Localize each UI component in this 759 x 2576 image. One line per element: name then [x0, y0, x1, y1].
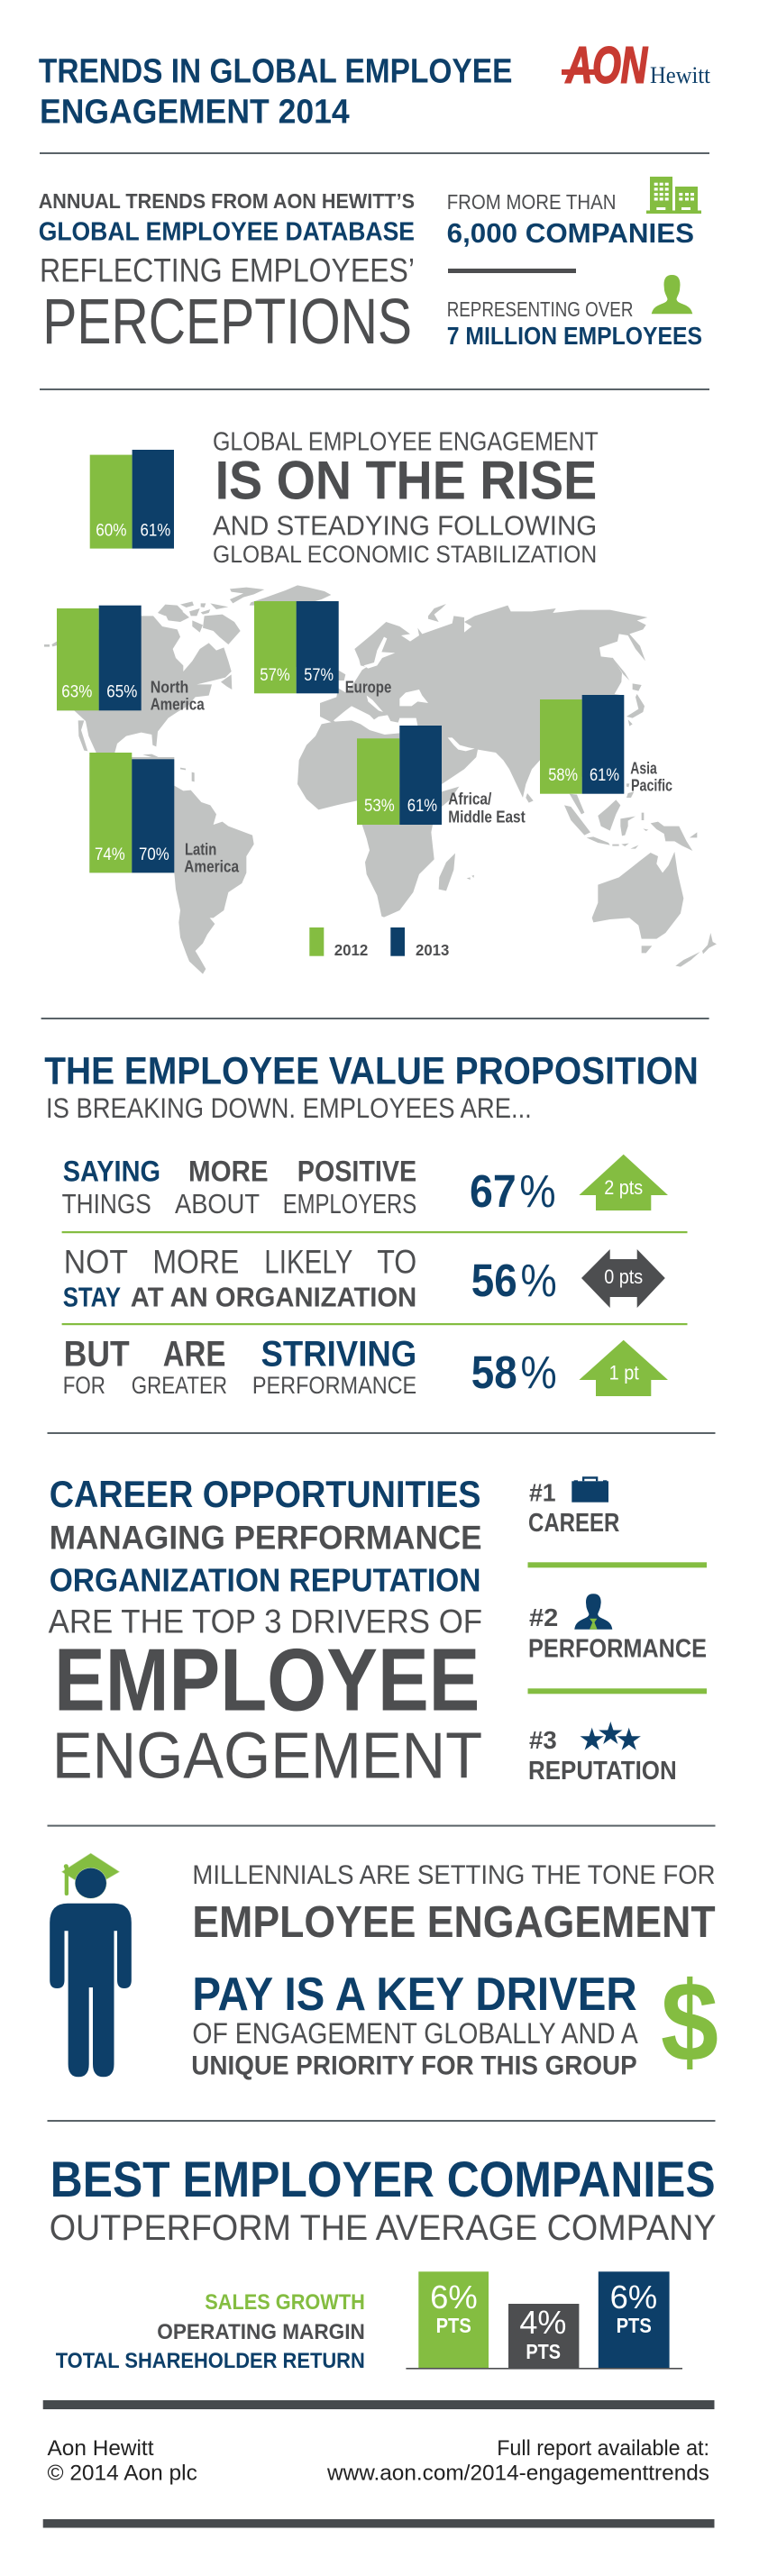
text block: employees	[447, 297, 702, 350]
text block: drivers statement: CAREER OPPORTUNITIES	[50, 1473, 480, 1515]
panel: top 3 drivers	[49, 1473, 707, 1793]
heading	[50, 2151, 717, 2248]
row: saying more positive	[62, 1155, 668, 1219]
row: not more likely to stay: MORE	[152, 1244, 239, 1281]
row: striving: FOR	[63, 1372, 105, 1399]
chart: North America: 65%	[106, 682, 137, 701]
legend: metrics: TOTAL SHAREHOLDER RETURN	[56, 2349, 365, 2373]
chart: North America	[57, 606, 205, 713]
bar chart: points difference: 6%	[430, 2279, 478, 2316]
icon: briefcase	[572, 1476, 608, 1503]
chart: Africa / Middle East: Africa/	[448, 789, 491, 808]
text block: millennials: MILLENNIALS ARE SETTING THE TONE FOR	[192, 1860, 716, 1890]
panel: footer: Aon Hewitt	[47, 2436, 154, 2461]
bar chart: points difference: PTS	[526, 2340, 561, 2363]
icon: graduate figure	[50, 1853, 132, 2077]
text block: annual trends	[39, 189, 415, 358]
title: ENGAGEMENT 2014	[40, 94, 350, 132]
row: striving	[63, 1335, 668, 1399]
panel: global engagement	[44, 427, 717, 974]
text block: companies	[447, 190, 694, 249]
panel: footer: Full report available at:	[497, 2436, 709, 2461]
icon: three stars	[580, 1721, 642, 1750]
chart: global bars: 60%	[96, 522, 127, 541]
panel: best employers	[50, 2151, 717, 2373]
heading: is on the rise: AND STEADYING FOLLOWING	[213, 509, 597, 541]
chart: Europe: 57%	[304, 666, 334, 685]
heading: is on the rise: GLOBAL EMPLOYEE ENGAGEMENT	[213, 427, 599, 456]
bar chart: points difference	[406, 2271, 682, 2370]
text block: annual trends: ANNUAL TRENDS FROM AON HEWITT’S	[39, 189, 415, 213]
row: saying more positive: POSITIVE	[297, 1156, 416, 1188]
chart: North America: America	[151, 694, 205, 713]
title	[39, 53, 512, 132]
bar chart: points difference: 4%	[519, 2304, 566, 2341]
chart: Latin America: 74%	[95, 845, 125, 864]
heading: THE EMPLOYEE VALUE PROPOSITION	[44, 1049, 699, 1092]
icon: businessman	[574, 1594, 612, 1630]
chart: Europe: 57%	[260, 666, 290, 685]
bar chart: points difference: 6%	[610, 2279, 657, 2316]
row: saying more positive: THINGS	[62, 1189, 151, 1219]
driver 3: reputation: #3	[529, 1726, 557, 1754]
text block: millennials: PAY IS A KEY DRIVER	[192, 1969, 637, 2021]
row: not more likely to stay: 56	[471, 1255, 517, 1306]
driver 1: career	[528, 1476, 619, 1538]
legend: 2012	[334, 941, 369, 959]
row: saying more positive: 2 pts	[604, 1176, 643, 1199]
heading: is on the rise	[213, 427, 599, 568]
text block: drivers statement	[49, 1473, 482, 1793]
text block: drivers statement: EMPLOYEE	[54, 1631, 480, 1730]
row: saying more positive: MORE	[188, 1156, 269, 1188]
row: not more likely to stay: LIKELY	[264, 1244, 352, 1281]
chart: global bars	[90, 450, 174, 549]
chart: Asia Pacific	[540, 695, 672, 794]
row: saying more positive: EMPLOYERS	[283, 1189, 416, 1219]
chart: Africa / Middle East: 61%	[407, 797, 437, 816]
legend	[309, 927, 450, 959]
panel: database summary	[39, 177, 702, 358]
row: striving: 1 pt	[609, 1362, 639, 1384]
row: striving: ARE	[163, 1335, 225, 1375]
panel: employee value proposition	[44, 1049, 699, 1399]
row: saying more positive: SAYING	[63, 1156, 160, 1188]
text block: companies: 6,000 COMPANIES	[447, 217, 694, 249]
row: saying more positive: ABOUT	[175, 1189, 260, 1219]
panel: footer: © 2014 Aon plc	[47, 2462, 197, 2486]
chart: Europe: Europe	[345, 677, 391, 696]
row: striving: %	[521, 1347, 557, 1398]
row: not more likely to stay	[63, 1244, 665, 1312]
icon: buildings	[646, 177, 701, 214]
text block: millennials: UNIQUE PRIORITY FOR THIS GROUP	[191, 2051, 637, 2081]
text block: millennials: OF ENGAGEMENT GLOBALLY AND A	[192, 2017, 638, 2050]
chart: Latin America: America	[184, 856, 240, 875]
row: not more likely to stay: STAY	[63, 1282, 121, 1312]
row: saying more positive: 67	[470, 1165, 517, 1217]
chart: Asia Pacific: 61%	[590, 766, 619, 785]
text block: millennials	[191, 1860, 716, 2081]
bar chart: points difference: PTS	[617, 2314, 652, 2337]
row: not more likely to stay: AT AN ORGANIZATION	[131, 1282, 416, 1312]
logo: Aon Hewitt: AON	[565, 36, 648, 94]
text block: companies: FROM MORE THAN	[447, 190, 617, 214]
chart: Asia Pacific: Pacific	[631, 775, 672, 794]
chart: Latin America	[89, 753, 240, 875]
heading	[44, 1049, 699, 1124]
driver 2: performance: #2	[529, 1603, 558, 1631]
chart: North America: 63%	[61, 682, 92, 701]
legend: metrics: SALES GROWTH	[205, 2290, 365, 2315]
legend: metrics	[56, 2290, 365, 2373]
chart: North America: North	[151, 677, 188, 696]
text block: drivers statement: MANAGING PERFORMANCE	[50, 1520, 482, 1557]
row: not more likely to stay: %	[521, 1255, 557, 1306]
heading: IS BREAKING DOWN. EMPLOYEES ARE...	[46, 1092, 532, 1124]
driver 1: career: #1	[529, 1479, 556, 1507]
row: striving: BUT	[64, 1335, 130, 1375]
legend: metrics: OPERATING MARGIN	[157, 2320, 365, 2344]
panel: footer	[47, 2436, 709, 2486]
panel: millennials	[50, 1853, 718, 2085]
chart: Asia Pacific: 58%	[548, 766, 578, 785]
driver 1: career: CAREER	[528, 1509, 619, 1538]
row: saying more positive: %	[519, 1165, 556, 1217]
row: striving: STRIVING	[261, 1335, 416, 1375]
text block: drivers statement: ENGAGEMENT	[52, 1720, 482, 1793]
row: striving: 58	[471, 1347, 517, 1398]
text block: annual trends: GLOBAL EMPLOYEE DATABASE	[39, 218, 415, 247]
chart: Latin America: 70%	[139, 845, 169, 864]
row: not more likely to stay: TO	[377, 1244, 416, 1281]
chart: Asia Pacific: Asia	[630, 758, 657, 777]
panel: header	[39, 36, 711, 132]
row: not more likely to stay: NOT	[64, 1244, 128, 1281]
panel: footer: www.aon.com/2014-engagementtrends	[326, 2462, 709, 2486]
chart: Africa / Middle East: 53%	[364, 797, 395, 816]
world map	[44, 585, 717, 974]
chart: global bars: 61%	[141, 522, 170, 541]
row: striving: PERFORMANCE	[252, 1372, 416, 1399]
icon: person	[652, 275, 692, 314]
driver 3: reputation: REPUTATION	[528, 1757, 677, 1786]
title: TRENDS IN GLOBAL EMPLOYEE	[39, 53, 512, 91]
row: not more likely to stay: 0 pts	[604, 1265, 643, 1288]
chart: Africa / Middle East	[357, 726, 526, 826]
text block: employees: 7 MILLION EMPLOYEES	[447, 322, 702, 350]
chart: Latin America: Latin	[185, 839, 216, 858]
text block: drivers statement: ORGANIZATION REPUTATION	[50, 1562, 480, 1599]
driver 3: reputation	[528, 1721, 677, 1786]
chart: Europe	[254, 601, 391, 696]
logo: Aon Hewitt: Hewitt	[650, 62, 711, 88]
heading: is on the rise: GLOBAL ECONOMIC STABILIZATION	[213, 541, 597, 568]
text block: millennials: EMPLOYEE ENGAGEMENT	[192, 1897, 716, 1947]
driver 2: performance	[528, 1594, 707, 1664]
icon: dollar sign: $	[661, 1958, 718, 2085]
text block: employees: REPRESENTING OVER	[447, 297, 633, 321]
driver 2: performance: PERFORMANCE	[528, 1635, 707, 1664]
heading: is on the rise: IS ON THE RISE	[215, 451, 597, 510]
row: striving: GREATER	[132, 1372, 227, 1399]
text block: drivers statement: ARE THE TOP 3 DRIVERS OF	[49, 1603, 482, 1640]
text block: annual trends: PERCEPTIONS	[42, 287, 412, 358]
text block: annual trends: REFLECTING EMPLOYEES’	[40, 252, 415, 289]
bar chart: points difference: PTS	[436, 2314, 471, 2337]
heading: OUTPERFORM THE AVERAGE COMPANY	[50, 2208, 717, 2248]
chart: Africa / Middle East: Middle East	[448, 807, 526, 826]
legend: 2013	[416, 941, 450, 959]
